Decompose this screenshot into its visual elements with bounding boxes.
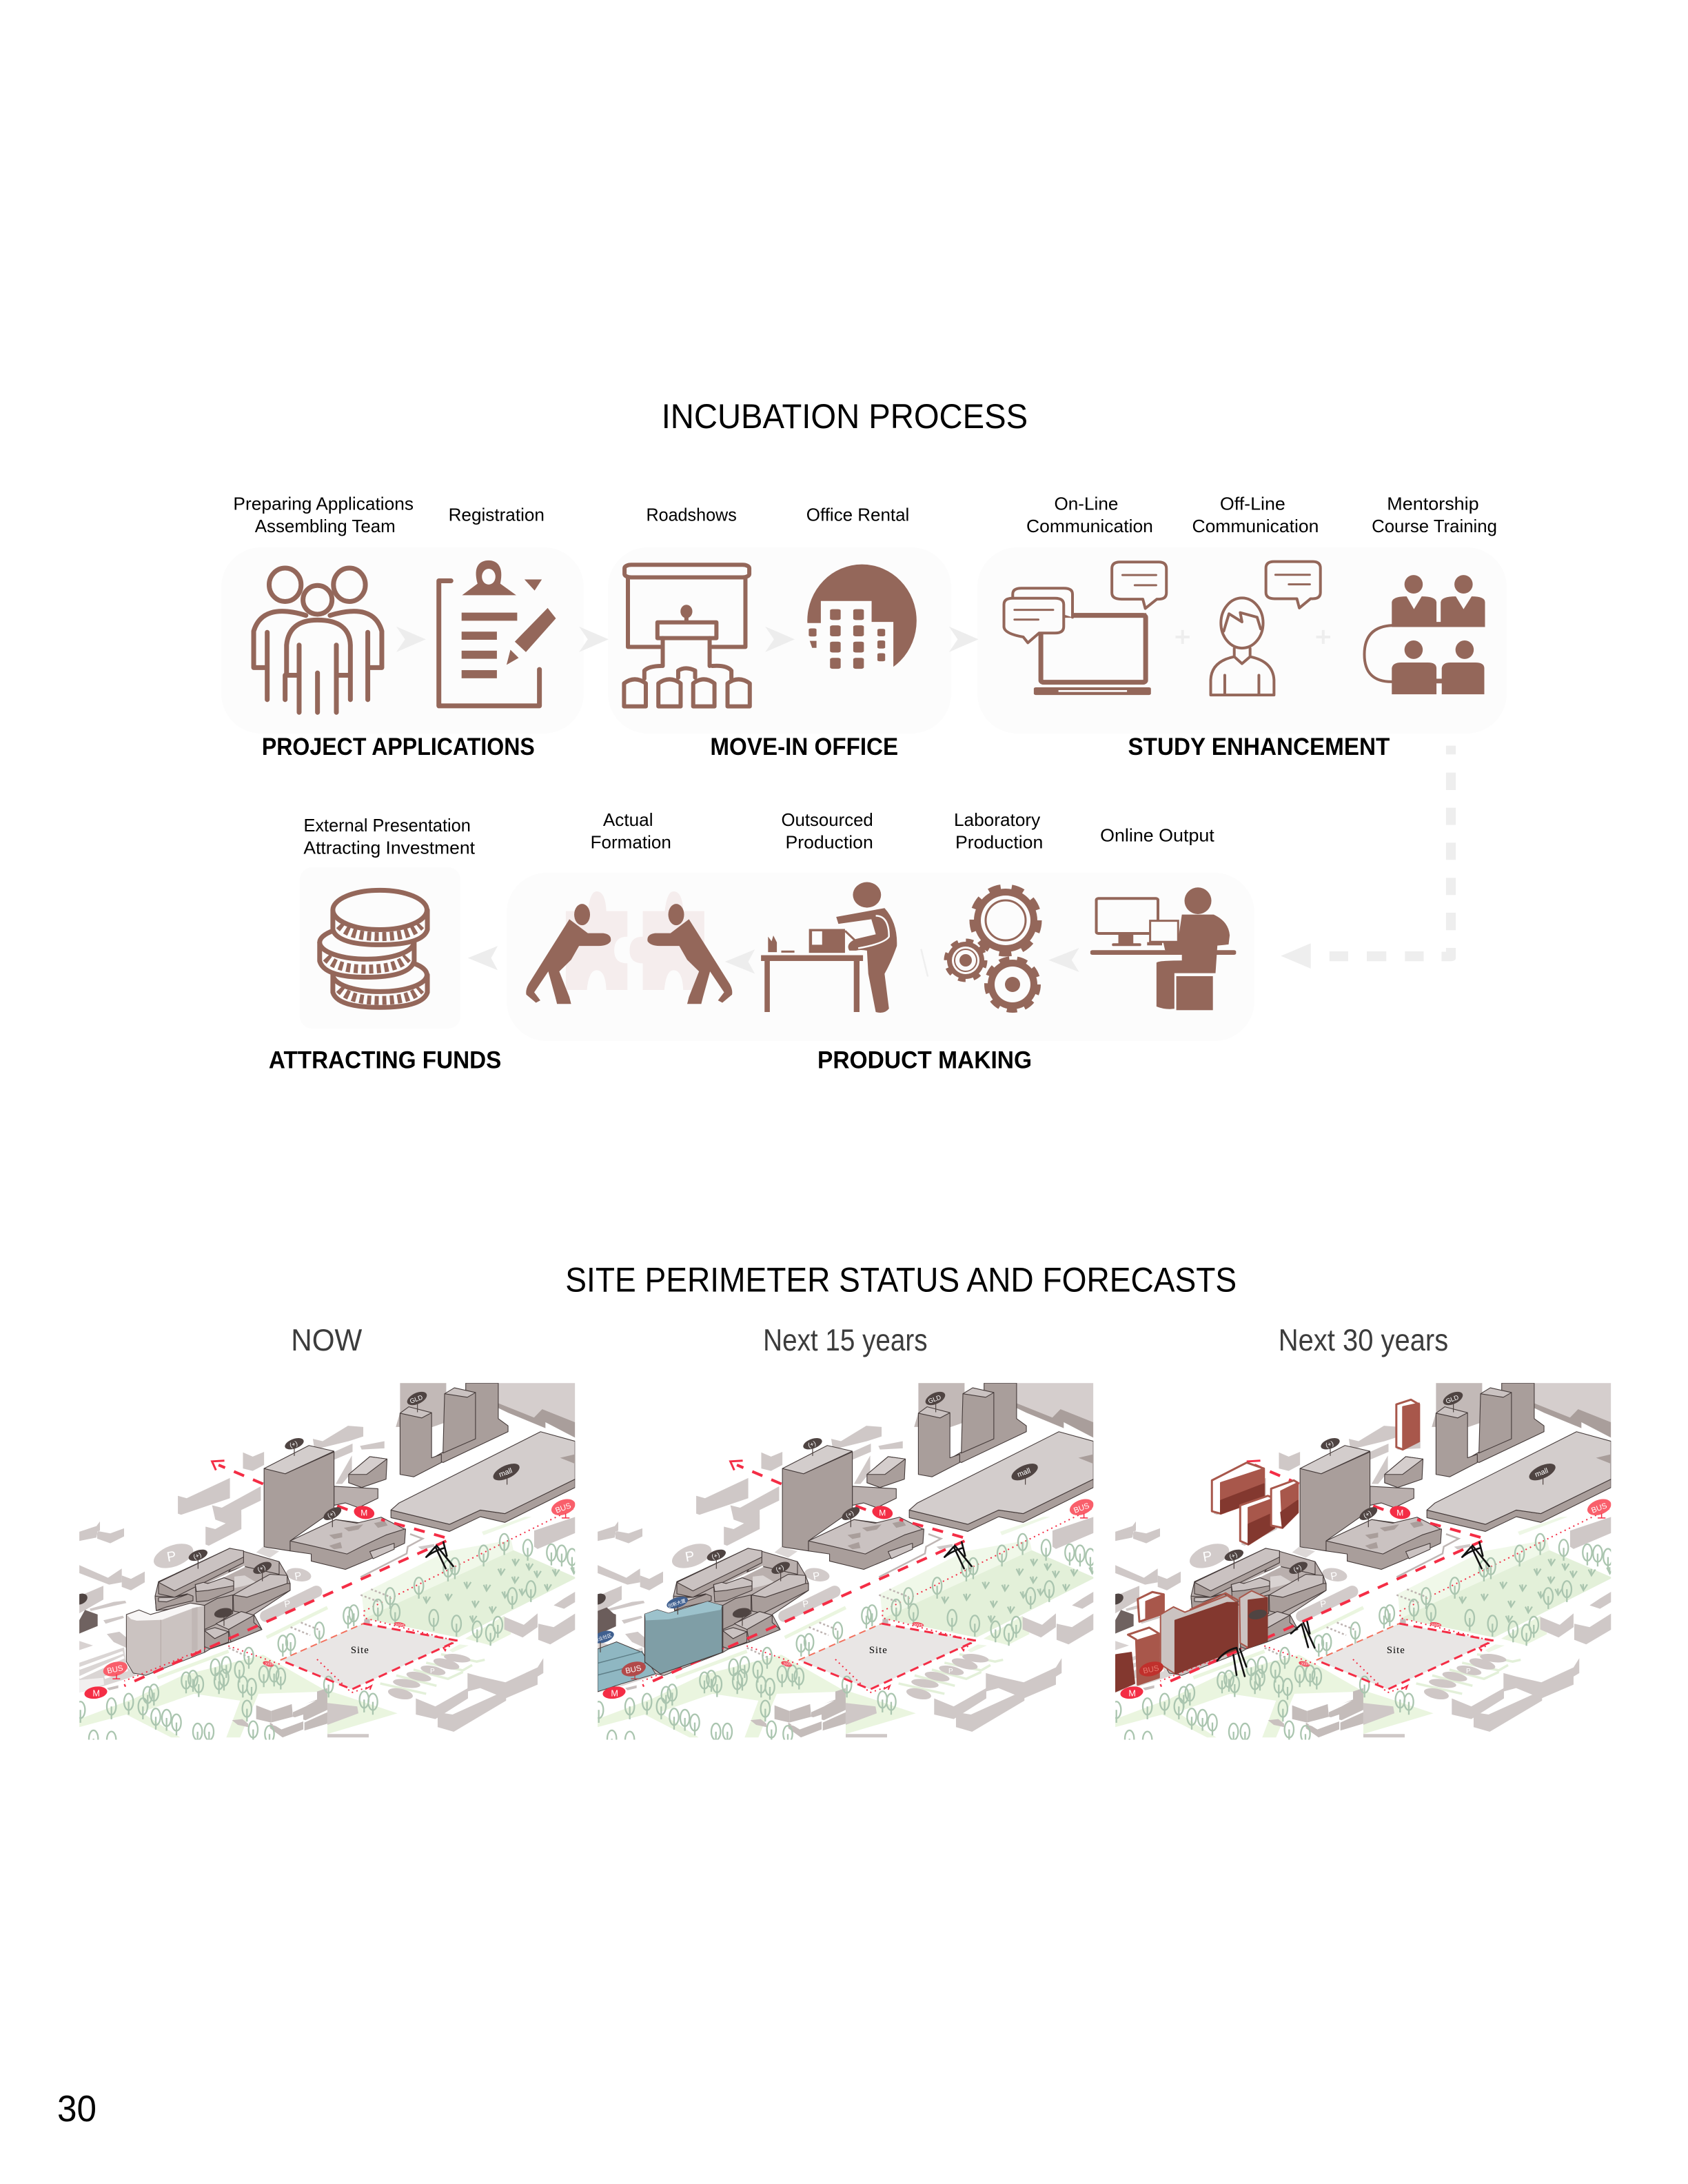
panel: attracting funds background: [300, 867, 460, 1029]
map: now: P: [294, 1570, 303, 1583]
map: next 30 years: BUS: [1142, 1664, 1160, 1676]
map: now: mall: [498, 1466, 513, 1479]
map: next 15 years: Site: [869, 1645, 888, 1656]
heading: attracting funds: ATTRACTING FUNDS: [269, 1047, 501, 1074]
map: next 15 years: (+): [711, 1551, 720, 1560]
icon: person at computer: [1090, 887, 1236, 1010]
panel: study enhancement background: [977, 547, 1507, 734]
heading: product making: PRODUCT MAKING: [817, 1047, 1032, 1074]
map: next 30 years: P: [1319, 1598, 1328, 1610]
label: mentorship course training: Course Training: [1372, 516, 1497, 536]
map: next 15 years: P: [948, 1668, 953, 1675]
label: preparing applications: [233, 493, 414, 536]
label: preparing applications: Preparing Applications: [233, 493, 414, 514]
map: next 30 years: 200m: [1431, 1624, 1441, 1628]
red development towers: [1115, 1399, 1419, 1692]
map: next 15 years: mall: [1016, 1466, 1032, 1479]
arrow: step chevrons upper row: [396, 627, 979, 652]
map: next 30 years: 200m: [1301, 1663, 1310, 1667]
label: registration: Registration: [449, 505, 545, 525]
map: now: M: [360, 1508, 367, 1518]
map: next 15 years: M: [611, 1688, 618, 1698]
map: next 30 years: Site: [1387, 1645, 1405, 1656]
map: now: (+): [289, 1439, 298, 1449]
map: next 15 years: M: [879, 1508, 886, 1518]
map: next 30 years: (+): [1325, 1439, 1334, 1449]
map: now: BUS: [106, 1664, 124, 1676]
label: laboratory production: Laboratory: [954, 809, 1041, 830]
map: next 30 years: (+): [1362, 1509, 1372, 1519]
map: now: P: [430, 1668, 435, 1675]
label: roadshows: Roadshows: [646, 505, 737, 525]
map: now: Site: [351, 1645, 369, 1656]
heading: project applications: PROJECT APPLICATIONS: [262, 734, 535, 760]
map: next 30 years: M: [1128, 1688, 1136, 1698]
map: next 15 years: GLD: [927, 1394, 942, 1405]
title: incubation process: INCUBATION PROCESS: [662, 396, 1028, 436]
map: now: (+): [192, 1551, 202, 1560]
label: mentorship course training: [1372, 493, 1497, 536]
label: actual formation: Formation: [591, 831, 671, 852]
arrow: chevrons lower row: [468, 946, 755, 973]
map: next 15 years: 创新大厦: [667, 1597, 687, 1609]
icon: laptop with speech bubbles: [1004, 562, 1166, 695]
label: actual formation: [591, 809, 671, 852]
panel: move-in office background: [608, 547, 951, 734]
label: outsourced production: [781, 809, 873, 852]
label: off-line communication: Off-Line: [1220, 493, 1285, 514]
icon: worker at desk: [761, 882, 897, 1013]
map: now: GLD: [409, 1394, 424, 1405]
icon: roadshow presentation: [624, 565, 750, 707]
map: next 15 years: (+): [807, 1439, 817, 1449]
label: office rental: Office Rental: [806, 505, 909, 525]
map: next 30 years: BUS: [1590, 1502, 1609, 1515]
title: site perimeter status and forecasts: SITE PERIMETER STATUS AND FORECASTS: [565, 1260, 1237, 1300]
map: now: P: [283, 1598, 292, 1610]
map: next 15 years: BUS: [624, 1664, 642, 1676]
map: now: 200m: [395, 1624, 405, 1628]
map: next 30 years: GLD: [1445, 1394, 1460, 1405]
map: next 15 years: [590, 1383, 1096, 1752]
map: next 15 years: 200m: [783, 1663, 793, 1667]
map: now: M: [92, 1688, 100, 1698]
label: external presentation: External Presentation: [303, 815, 471, 836]
label: laboratory production: Production: [955, 831, 1043, 852]
map: next 15 years: BUS: [1072, 1502, 1091, 1515]
subtitle: now: NOW: [291, 1324, 362, 1357]
heading: study enhancement: STUDY ENHANCEMENT: [1128, 734, 1390, 760]
icon: two figures pushing puzzle pieces: [526, 891, 732, 1004]
map: next 30 years: P: [1201, 1548, 1213, 1565]
label: external presentation: Attracting Investment: [303, 838, 476, 858]
icon: stack of coins: [320, 890, 427, 1007]
map: next 15 years: P: [684, 1548, 695, 1565]
blue development cluster: [598, 1601, 722, 1692]
map: next 30 years: (+): [1228, 1551, 1238, 1560]
label: on-line communication: Communication: [1026, 516, 1153, 536]
panel: project applications background: [221, 547, 584, 734]
map: next 15 years: P: [812, 1570, 821, 1583]
label: on-line communication: On-Line: [1054, 493, 1118, 514]
page number: 30: [57, 2088, 96, 2130]
label: outsourced production: Outsourced: [781, 809, 873, 830]
arrow: faint chevrons beside gears: [921, 948, 1079, 977]
label: online output: Online Output: [1100, 825, 1215, 845]
icon: person with speech bubble: [1211, 562, 1321, 695]
map: next 30 years: P: [1330, 1570, 1339, 1583]
map: next 30 years: (+): [1292, 1564, 1303, 1573]
icon: mentorship training table: [1364, 575, 1485, 694]
icon: clipboard with pencil: [439, 560, 556, 706]
label: outsourced production: Production: [786, 831, 873, 852]
label: external presentation: [303, 815, 476, 858]
subtitle: next 15 years: Next 15 years: [763, 1324, 928, 1357]
map: next 15 years: 创业社区: [593, 1632, 613, 1644]
map: next 30 years: P: [1466, 1668, 1471, 1675]
icon: office building in disc: [797, 565, 922, 680]
label: actual formation: Actual: [603, 809, 653, 830]
arrow: dashed connector between rows: [1281, 746, 1456, 969]
icon: plus signs: [1176, 630, 1330, 644]
icon: gears: [946, 887, 1039, 1011]
map: next 30 years: [1108, 1383, 1614, 1752]
label: on-line communication: [1026, 493, 1153, 536]
map: now: [72, 1383, 578, 1752]
map: now: P: [165, 1548, 177, 1565]
map: next 15 years: (+): [844, 1509, 855, 1519]
map: now: 200m: [265, 1663, 274, 1667]
map: next 15 years: 200m: [913, 1624, 923, 1628]
label: off-line communication: Communication: [1192, 516, 1319, 536]
map: now: (+): [326, 1509, 336, 1519]
subtitle: next 30 years: Next 30 years: [1279, 1324, 1448, 1357]
label: off-line communication: [1192, 493, 1319, 536]
panel: product making background: [507, 873, 1254, 1041]
map: now: BUS: [554, 1502, 573, 1515]
map: now: (+): [256, 1564, 267, 1573]
label: mentorship course training: Mentorship: [1387, 493, 1479, 514]
map: next 30 years: mall: [1534, 1466, 1549, 1479]
label: laboratory production: [954, 809, 1043, 852]
label: preparing applications: Assembling Team: [255, 516, 396, 536]
map: next 30 years: M: [1396, 1508, 1403, 1518]
map: next 15 years: P: [802, 1598, 810, 1610]
icon: team of people: [254, 568, 382, 712]
map: next 15 years: (+): [775, 1564, 785, 1573]
heading: move-in office: MOVE-IN OFFICE: [710, 734, 898, 760]
